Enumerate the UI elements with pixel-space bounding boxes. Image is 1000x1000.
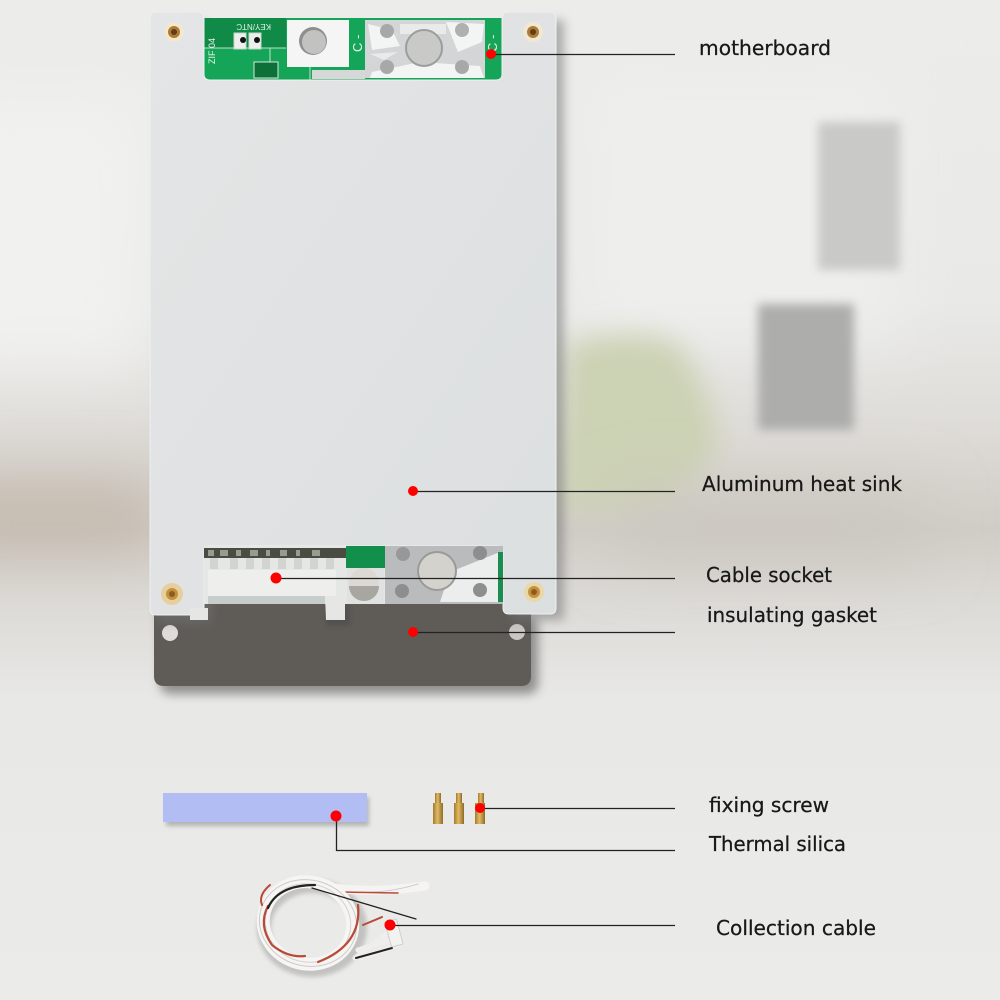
- brass standoff nuts on heat sink: [161, 22, 544, 605]
- leader: cable socket: [270, 572, 675, 584]
- leader: fixing screw: [475, 803, 675, 813]
- label: fixing screw: fixing screw: [709, 793, 829, 817]
- motherboard top exposed area: [204, 18, 503, 80]
- leader: aluminum heat sink: [408, 486, 675, 496]
- board silk text: KEY/NTC: [236, 22, 271, 31]
- leader: thermal silica: [330, 810, 675, 850]
- label: Aluminum heat sink: Aluminum heat sink: [702, 472, 902, 496]
- leader: collection cable: [384, 920, 675, 930]
- motherboard top exposed area: C -: [485, 35, 500, 52]
- motherboard top exposed area: ZIF 04: [207, 38, 217, 64]
- insulating gasket: [154, 604, 538, 694]
- aluminum heat sink: [150, 12, 564, 626]
- label: motherboard: motherboard: [699, 36, 831, 60]
- label: Thermal silica: Thermal silica: [708, 832, 846, 856]
- motherboard top exposed area: C -: [350, 35, 365, 52]
- heat sink plate: [150, 12, 556, 615]
- label: Collection cable: Collection cable: [716, 916, 876, 940]
- label: insulating gasket: insulating gasket: [707, 603, 877, 627]
- leader: insulating gasket: [408, 627, 675, 637]
- fixing screws: [433, 793, 485, 824]
- leader: motherboard: [486, 49, 675, 59]
- thermal silica pad: [163, 793, 369, 826]
- collection cable: [250, 869, 425, 977]
- bottom exposed socket: [190, 546, 503, 620]
- label: Cable socket: Cable socket: [706, 563, 832, 587]
